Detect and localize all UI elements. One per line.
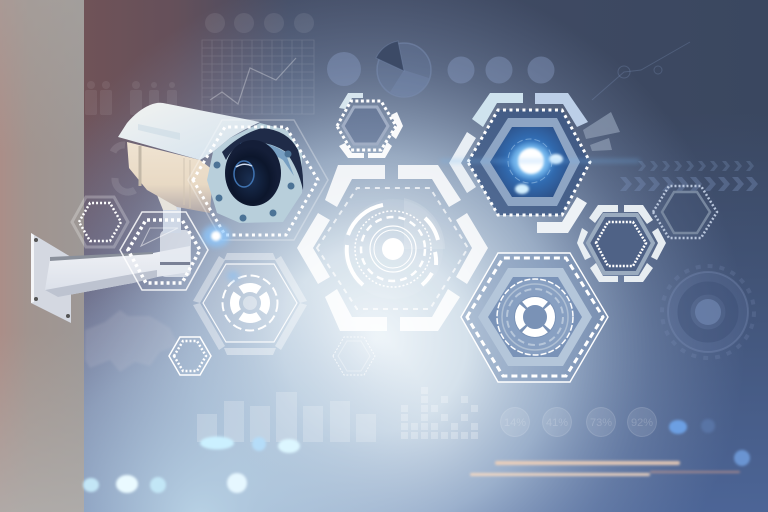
line chart grid [202, 40, 314, 114]
hexagon: far right [653, 186, 717, 238]
bar chart [197, 392, 376, 442]
bokeh lights [83, 419, 750, 493]
hexagon: small top centre [337, 93, 403, 158]
faint donut shapes [113, 145, 135, 192]
hexagon: small lower left [169, 337, 211, 375]
horizontal light streaks [470, 461, 740, 476]
camera arm and mount plate [31, 190, 191, 323]
hexagon: far-left small [72, 197, 128, 247]
percentage circles: 14% [504, 417, 526, 429]
top row of faint circles [205, 13, 314, 33]
middle row of faint circles [327, 52, 554, 86]
hexagon: right small [577, 205, 666, 282]
right-side network lines [592, 42, 690, 100]
hexagon: top right with glowing core [449, 93, 590, 233]
gear dial [662, 266, 754, 358]
camera body [118, 103, 260, 213]
hexagon: around camera lens [188, 120, 328, 240]
camera lens housing [207, 123, 303, 223]
chevron stripes [620, 161, 758, 191]
percentage circles [500, 408, 656, 436]
percentage circles: 73% [590, 417, 612, 429]
wedge fan beside hexagon [583, 112, 620, 151]
equalizer chart [401, 387, 478, 439]
lens flare [202, 225, 239, 281]
hexagon: lower circular reticle [193, 253, 307, 355]
people icons [85, 81, 177, 115]
hexagon: over arm [120, 212, 208, 290]
hexagon: lower right [461, 253, 608, 382]
percentage circles: 92% [631, 417, 653, 429]
light streak through glowing core [440, 159, 640, 163]
pie chart [376, 41, 431, 97]
world map silhouette [85, 310, 178, 372]
hexagon: small lower centre [333, 337, 375, 375]
percentage circles: 41% [546, 417, 568, 429]
hexagon: large centre [297, 165, 488, 331]
wall [0, 0, 84, 512]
